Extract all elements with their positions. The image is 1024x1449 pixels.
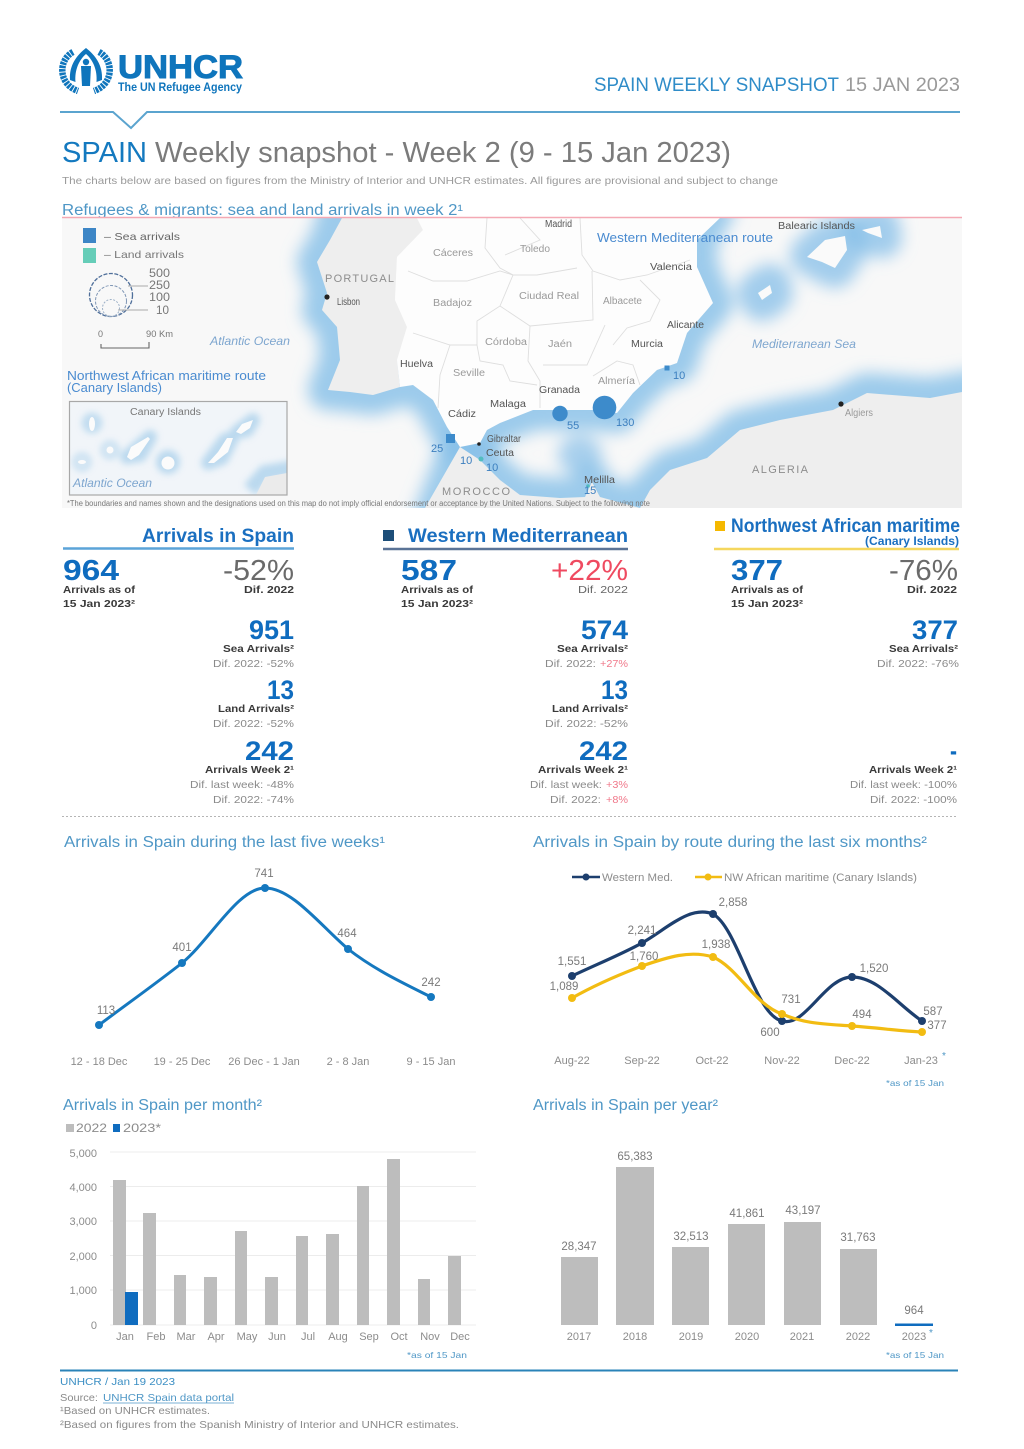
data labels: 1,938 bbox=[702, 939, 730, 951]
marker: 10 sea arrivals east bbox=[664, 366, 685, 382]
line series bbox=[95, 884, 435, 1029]
x axis labels: 2023 bbox=[902, 1331, 926, 1343]
x axis labels: Oct bbox=[390, 1331, 408, 1343]
data labels: 2,241 bbox=[628, 925, 656, 937]
map labels: oceans and routes: (Canary Islands) bbox=[67, 381, 162, 395]
map labels: places bbox=[324, 219, 873, 498]
sea arrivals: +27% bbox=[600, 658, 628, 670]
bar 2023 bbox=[895, 1324, 933, 1326]
map labels: places: Gibraltar bbox=[487, 434, 522, 445]
marker: 25 sea arrivals bbox=[431, 434, 455, 455]
x axis labels: Jul bbox=[301, 1331, 315, 1343]
x axis labels: Sep bbox=[359, 1331, 379, 1343]
inset map: Canary Islands bbox=[69, 401, 295, 495]
x axis labels: 2019 bbox=[679, 1331, 703, 1343]
data labels: 494 bbox=[852, 1009, 872, 1021]
x axis labels: 2 - 8 Jan bbox=[327, 1056, 369, 1068]
x axis labels: Aug-22 bbox=[554, 1055, 590, 1067]
arrivals week 2: Dif. last week: -48% bbox=[190, 779, 294, 791]
map panel bbox=[68, 218, 962, 508]
chart legend: NW African maritime (Canary Islands) bbox=[724, 872, 917, 884]
land arrivals bbox=[545, 675, 629, 730]
legend: proportional circles: 100 bbox=[149, 290, 170, 304]
footer source: UNHCR Spain data portal bbox=[103, 1392, 234, 1404]
line series: Western Med bbox=[568, 910, 926, 1025]
footer bbox=[60, 1376, 459, 1431]
x axis labels: 19 - 25 Dec bbox=[154, 1056, 211, 1068]
map labels: places: Cádiz bbox=[448, 409, 476, 420]
data labels: 587 bbox=[923, 1006, 943, 1018]
chart legend bbox=[66, 1121, 161, 1135]
x axis labels: 26 Dec - 1 Jan bbox=[228, 1056, 300, 1068]
arrivals week 2 bbox=[850, 736, 958, 806]
arrivals week 2: Dif. 2022: -74% bbox=[213, 794, 294, 806]
land arrivals bbox=[213, 675, 295, 730]
sea arrivals: Sea Arrivals² bbox=[557, 643, 629, 655]
sea arrivals bbox=[545, 615, 629, 670]
data labels bbox=[550, 897, 947, 1039]
sea arrivals: Dif. 2022: -76% bbox=[877, 658, 959, 670]
data labels: 731 bbox=[781, 994, 801, 1006]
data labels: 113 bbox=[97, 1005, 115, 1017]
total arrivals: 964 bbox=[63, 555, 119, 587]
x axis labels: Apr bbox=[207, 1331, 225, 1343]
data labels: 1,089 bbox=[550, 981, 578, 993]
marker: 10 land arrivals Ceuta bbox=[460, 455, 498, 474]
footnote 1: ¹Based on UNHCR estimates. bbox=[60, 1405, 210, 1417]
map labels: places: Malaga bbox=[490, 399, 526, 410]
chart legend: 2023* bbox=[123, 1121, 161, 1135]
arrivals week 2: - bbox=[950, 736, 957, 766]
map labels: places: Seville bbox=[453, 368, 485, 379]
marker: 15 Melilla: 15 bbox=[584, 485, 596, 497]
sea arrivals: Sea Arrivals² bbox=[223, 643, 295, 655]
footnote 2: ²Based on figures from the Spanish Ministry of Interior and UNHCR estimates. bbox=[60, 1419, 459, 1431]
map labels: places: Cáceres bbox=[433, 248, 473, 259]
arrivals week 2: 242 bbox=[579, 736, 628, 766]
x axis labels: Nov-22 bbox=[764, 1055, 800, 1067]
total arrivals bbox=[401, 555, 474, 610]
x axis labels bbox=[116, 1331, 470, 1343]
legend: proportional circles: 500 bbox=[149, 266, 170, 280]
UNHCR logo bbox=[62, 48, 243, 94]
map labels: oceans and routes: Atlantic Ocean bbox=[209, 334, 290, 348]
map labels: oceans and routes: Mediterranean Sea bbox=[752, 337, 856, 351]
chart heading: Arrivals in Spain per year² bbox=[533, 1097, 718, 1114]
panel: Northwest African maritime bbox=[714, 516, 960, 806]
x axis labels: Jan bbox=[116, 1331, 134, 1343]
map labels: places: ALGERIA bbox=[752, 464, 809, 476]
data labels: 377 bbox=[927, 1020, 947, 1032]
map labels: places: Huelva bbox=[400, 359, 433, 370]
map labels: places: MOROCCO bbox=[442, 486, 510, 498]
x axis labels: Dec-22 bbox=[834, 1055, 870, 1067]
data labels: 600 bbox=[760, 1027, 780, 1039]
logo wordmark: UNHCR bbox=[118, 49, 243, 85]
marker: 25 sea arrivals: 25 bbox=[431, 443, 443, 455]
y axis labels: 0 bbox=[91, 1320, 97, 1332]
x axis labels bbox=[554, 1055, 938, 1067]
data labels: 464 bbox=[337, 928, 357, 940]
difference 2022: -52% bbox=[223, 555, 294, 587]
y axis labels: 1,000 bbox=[69, 1285, 97, 1297]
chart note: *as of 15 Jan bbox=[407, 1350, 467, 1360]
chart heading: Arrivals in Spain by route during the last six months² bbox=[533, 834, 927, 851]
sea arrivals: Dif. 2022: bbox=[545, 658, 596, 670]
subtitle: The charts below are based on figures from the Ministry of Interior and UNHCR estimates. All figures are provisional and subject to change bbox=[62, 175, 778, 187]
data labels bbox=[561, 1151, 924, 1317]
bars bbox=[561, 1167, 877, 1325]
sea arrivals: Dif. 2022: -52% bbox=[213, 658, 294, 670]
map labels: places: Balearic Islands bbox=[778, 221, 855, 232]
chart: arrivals last five weeks bbox=[64, 834, 455, 1068]
total arrivals: Arrivals as of bbox=[401, 584, 474, 596]
data labels: 1,520 bbox=[860, 963, 888, 975]
arrivals week 2: Arrivals Week 2¹ bbox=[205, 764, 295, 776]
footer source bbox=[60, 1392, 234, 1404]
data labels: 741 bbox=[254, 868, 274, 880]
data labels: 1,551 bbox=[558, 956, 586, 968]
arrivals week 2: Dif. last week: bbox=[530, 779, 602, 791]
x axis labels: 2022 bbox=[846, 1331, 870, 1343]
arrivals week 2: Arrivals Week 2¹ bbox=[538, 764, 629, 776]
data labels: 964 bbox=[904, 1305, 924, 1317]
data labels: 31,763 bbox=[840, 1232, 876, 1244]
title: Weekly snapshot - Week 2 (9 - 15 Jan 2023) bbox=[155, 137, 731, 169]
x axis labels: Nov bbox=[420, 1331, 440, 1343]
map labels: places: Albacete bbox=[603, 296, 642, 307]
panel heading: Arrivals in Spain bbox=[142, 526, 294, 547]
inset ocean label: Atlantic Ocean bbox=[72, 476, 152, 490]
land arrivals: Dif. 2022: -52% bbox=[213, 718, 294, 730]
marker: 10 sea arrivals east: 10 bbox=[673, 370, 685, 382]
chart legend: 2022 bbox=[76, 1121, 107, 1135]
sea arrivals bbox=[213, 615, 295, 670]
legend: proportional circles: 250 bbox=[149, 278, 170, 292]
map labels: oceans and routes bbox=[67, 231, 856, 395]
arrivals week 2: Arrivals Week 2¹ bbox=[869, 764, 958, 776]
x axis labels: Jan-23 bbox=[904, 1055, 938, 1067]
map land: Balearic Islands bbox=[758, 226, 882, 300]
x axis labels: 2018 bbox=[623, 1331, 647, 1343]
x axis labels: Dec bbox=[450, 1331, 470, 1343]
marker: 55 sea arrivals bbox=[552, 406, 579, 432]
bars 2022 bbox=[113, 1159, 461, 1325]
chart: arrivals per month bbox=[63, 1097, 476, 1360]
map labels: places: Alicante bbox=[667, 320, 704, 331]
map labels: oceans and routes: Western Mediterranean route bbox=[597, 231, 773, 245]
y axis labels: 3,000 bbox=[69, 1216, 97, 1228]
land arrivals: 13 bbox=[267, 675, 294, 705]
header label: SPAIN WEEKLY SNAPSHOT bbox=[594, 75, 839, 96]
x axis labels: 12 - 18 Dec bbox=[71, 1056, 128, 1068]
map arrival markers bbox=[431, 366, 685, 497]
total arrivals: Arrivals as of bbox=[731, 584, 804, 596]
map land: Portugal bbox=[317, 218, 423, 395]
sea arrivals: 574 bbox=[581, 615, 628, 645]
sea arrivals: 951 bbox=[249, 615, 294, 645]
total arrivals bbox=[63, 555, 136, 610]
map labels: places: Granada bbox=[539, 385, 580, 396]
inset islands bbox=[78, 417, 253, 470]
chart: arrivals per year: * bbox=[929, 1328, 933, 1339]
arrivals week 2: Dif. last week: -100% bbox=[850, 779, 957, 791]
data labels: 43,197 bbox=[785, 1205, 821, 1217]
y axis labels: 4,000 bbox=[69, 1182, 97, 1194]
sea arrivals: 377 bbox=[912, 615, 958, 645]
x axis labels: Feb bbox=[147, 1331, 165, 1343]
map labels: places: Córdoba bbox=[485, 337, 527, 348]
data labels: 65,383 bbox=[617, 1151, 653, 1163]
data labels: 41,861 bbox=[729, 1208, 765, 1220]
chart heading: Arrivals in Spain per month² bbox=[63, 1097, 262, 1114]
header label bbox=[594, 75, 960, 96]
data labels bbox=[97, 868, 441, 1017]
chart: arrivals by route six months bbox=[533, 834, 947, 1088]
bar 2023 bbox=[125, 1292, 138, 1325]
data labels: 401 bbox=[172, 942, 192, 954]
y axis labels: 2,000 bbox=[69, 1251, 97, 1263]
x axis labels: 9 - 15 Jan bbox=[407, 1056, 455, 1068]
land arrivals: 13 bbox=[601, 675, 628, 705]
footer source: Source: bbox=[60, 1392, 98, 1404]
panel heading: Western Mediterranean bbox=[408, 526, 628, 547]
map heading: Refugees & migrants: sea and land arrivals in week 2¹ bbox=[62, 202, 463, 219]
chart: arrivals by route six months: * bbox=[942, 1051, 946, 1062]
map disclaimer: *The boundaries and names shown and the designations used on this map do not imply official endorsement or acceptance by the United Nations. Subject to the following note bbox=[67, 499, 651, 508]
marker: 10 land arrivals Ceuta: 10 bbox=[486, 462, 498, 474]
header label: 15 JAN 2023 bbox=[845, 75, 960, 96]
panel: Western Mediterranean bbox=[383, 526, 629, 806]
arrivals week 2 bbox=[530, 736, 629, 806]
map labels: places: Murcia bbox=[631, 339, 663, 350]
map labels: places: Ceuta bbox=[486, 448, 514, 459]
chart: arrivals per year bbox=[533, 1097, 944, 1360]
total arrivals bbox=[731, 555, 804, 610]
marker: 55 sea arrivals: 55 bbox=[567, 420, 579, 432]
x axis labels: Oct-22 bbox=[695, 1055, 729, 1067]
data labels: 32,513 bbox=[673, 1231, 709, 1243]
map land: Spain bbox=[395, 218, 720, 447]
data labels: 28,347 bbox=[561, 1241, 597, 1253]
map labels: places: Almería bbox=[598, 376, 635, 387]
legend: scale bar bbox=[98, 329, 173, 348]
map labels: places: Lisbon bbox=[337, 297, 360, 308]
x axis labels: Jun bbox=[268, 1331, 286, 1343]
legend: land arrivals: – Land arrivals bbox=[104, 249, 184, 261]
x axis labels: Sep-22 bbox=[624, 1055, 660, 1067]
x axis labels: Mar bbox=[177, 1331, 196, 1343]
map labels: places: Madrid bbox=[545, 219, 572, 230]
legend: proportional circles bbox=[90, 266, 170, 317]
title: SPAIN bbox=[62, 137, 147, 169]
difference 2022: +22% bbox=[551, 555, 628, 587]
difference 2022: Dif. 2022 bbox=[578, 584, 628, 596]
map legend bbox=[83, 228, 184, 348]
x axis labels: Aug bbox=[328, 1331, 348, 1343]
data labels: 1,760 bbox=[630, 951, 658, 963]
legend: scale bar: 90 Km bbox=[146, 329, 173, 339]
total arrivals: 587 bbox=[401, 555, 457, 587]
map labels: places: Valencia bbox=[650, 262, 692, 273]
legend: proportional circles: 10 bbox=[156, 303, 169, 317]
land arrivals: Land Arrivals² bbox=[218, 703, 295, 715]
marker: 10 land arrivals Ceuta: 10 bbox=[460, 455, 472, 467]
map labels: places: Algiers bbox=[845, 408, 873, 419]
data labels: 242 bbox=[421, 977, 441, 989]
total arrivals: 377 bbox=[731, 555, 783, 587]
total arrivals: 15 Jan 2023² bbox=[401, 598, 474, 610]
legend: scale bar: 0 bbox=[98, 329, 103, 339]
arrivals week 2: 242 bbox=[245, 736, 294, 766]
inset label: Canary Islands bbox=[130, 407, 201, 418]
x axis labels: May bbox=[237, 1331, 258, 1343]
map labels: places: Ciudad Real bbox=[519, 291, 579, 302]
panel heading bbox=[715, 516, 960, 548]
arrivals week 2: Dif. 2022: bbox=[550, 794, 601, 806]
data labels: 2,858 bbox=[719, 897, 747, 909]
map labels: places: Melilla bbox=[584, 475, 615, 486]
map labels: oceans and routes: Northwest African maritime route bbox=[67, 369, 266, 383]
difference 2022: Dif. 2022 bbox=[244, 584, 294, 596]
x axis labels: 2020 bbox=[735, 1331, 759, 1343]
difference 2022: -76% bbox=[889, 555, 958, 587]
arrivals week 2: Dif. 2022: -100% bbox=[870, 794, 957, 806]
land arrivals: Dif. 2022: -52% bbox=[545, 718, 628, 730]
x axis labels: 2017 bbox=[567, 1331, 591, 1343]
line series: NW African maritime bbox=[568, 953, 926, 1036]
legend: sea arrivals: – Sea arrivals bbox=[104, 231, 180, 243]
sea arrivals: Sea Arrivals² bbox=[889, 643, 959, 655]
map labels: places: PORTUGAL bbox=[325, 273, 394, 285]
arrivals week 2 bbox=[190, 736, 295, 806]
panel heading: (Canary Islands) bbox=[865, 536, 959, 548]
chart note: *as of 15 Jan bbox=[886, 1350, 944, 1360]
panel heading: Northwest African maritime bbox=[731, 516, 960, 537]
y axis labels bbox=[69, 1148, 97, 1332]
map land: Morocco and Algeria bbox=[425, 392, 962, 508]
marker: 130 sea arrivals: 130 bbox=[616, 417, 634, 429]
x axis labels bbox=[567, 1331, 926, 1343]
total arrivals: 15 Jan 2023² bbox=[63, 598, 136, 610]
y axis labels: 5,000 bbox=[69, 1148, 97, 1160]
chart heading: Arrivals in Spain during the last five weeks¹ bbox=[64, 834, 385, 851]
x axis labels: 2021 bbox=[790, 1331, 814, 1343]
total arrivals: 15 Jan 2023² bbox=[731, 598, 804, 610]
arrivals week 2: +3% bbox=[606, 779, 628, 791]
chart legend: Western Med. bbox=[602, 872, 673, 884]
land arrivals: Land Arrivals² bbox=[552, 703, 629, 715]
sea arrivals bbox=[877, 615, 959, 670]
map labels: places: Badajoz bbox=[433, 298, 472, 309]
arrivals week 2: +8% bbox=[606, 794, 628, 806]
chart note: *as of 15 Jan bbox=[886, 1078, 944, 1088]
map coastal glow bbox=[317, 200, 985, 525]
icon: UNHCR emblem bbox=[62, 48, 110, 91]
logo tagline: The UN Refugee Agency bbox=[118, 82, 243, 94]
total arrivals: Arrivals as of bbox=[63, 584, 136, 596]
map labels: places: Toledo bbox=[520, 244, 550, 255]
marker: 130 sea arrivals bbox=[593, 396, 634, 429]
chart legend bbox=[572, 872, 917, 884]
footer credit: UNHCR / Jan 19 2023 bbox=[60, 1376, 175, 1388]
map labels: places: Jaén bbox=[548, 339, 572, 350]
panel: Arrivals in Spain bbox=[63, 526, 295, 806]
difference 2022: Dif. 2022 bbox=[907, 584, 957, 596]
x axis labels bbox=[71, 1056, 455, 1068]
